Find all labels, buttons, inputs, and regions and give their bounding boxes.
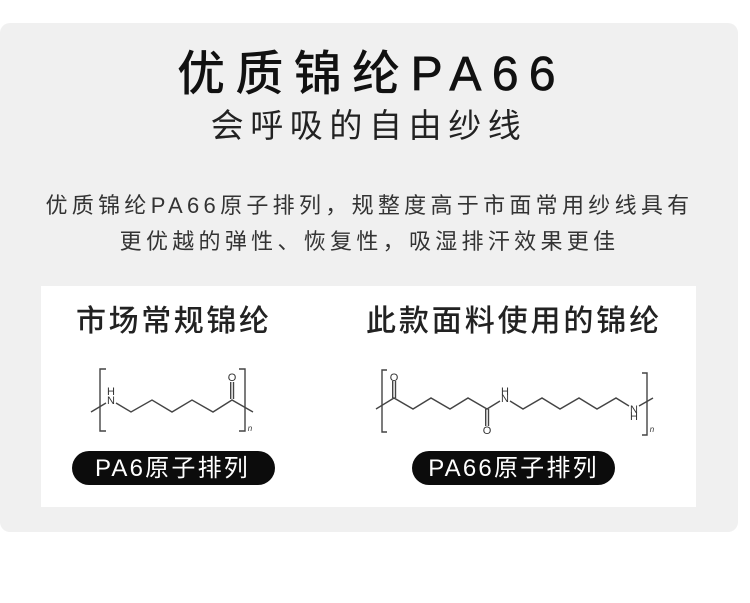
subtitle: 会呼吸的自由纱线	[211, 107, 527, 144]
label pill: PA6	[72, 451, 275, 485]
chart: PA6 molecular structure: N	[107, 395, 115, 407]
heading: common nylon: 市场常规锦纶	[76, 305, 272, 338]
description text	[46, 193, 694, 254]
label pill: PA66	[412, 451, 615, 485]
chart: PA66 molecular structure: N	[630, 404, 638, 416]
chart: PA66 molecular structure: H	[630, 411, 638, 423]
heading: this fabric nylon: 此款面料使用的锦纶	[366, 305, 662, 338]
chart: PA66 molecular structure: H	[501, 386, 509, 398]
chart: PA6 molecular structure: H	[107, 386, 115, 398]
title: 优质锦纶PA66	[177, 48, 566, 101]
description text: 更优越的弹性、恢复性，吸湿排汗效果更佳	[120, 229, 619, 254]
chart: PA6 molecular structure: n	[248, 424, 253, 433]
chart: PA66 molecular structure: N	[501, 393, 509, 405]
label pill: PA6: PA6原子排列	[95, 455, 250, 482]
chart: PA66 molecular structure: O	[390, 372, 399, 384]
label pill: PA66: PA66原子排列	[428, 455, 599, 482]
chart: PA6 molecular structure: O	[228, 372, 237, 384]
chart: PA66 molecular structure: n	[650, 425, 655, 434]
chart: PA66 molecular structure: O	[483, 425, 492, 437]
panel: comparison	[41, 286, 696, 507]
description text: 优质锦纶PA66原子排列，规整度高于市面常用纱线具有	[46, 193, 694, 218]
